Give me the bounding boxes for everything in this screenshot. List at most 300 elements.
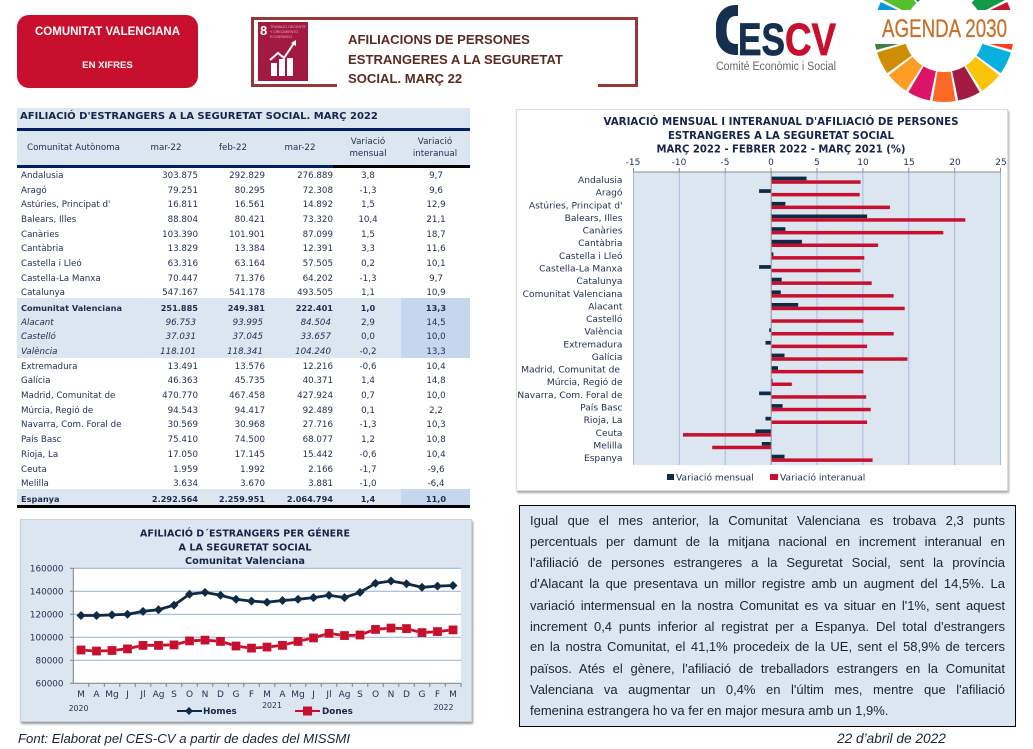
category labels: Rioja, La (584, 416, 622, 426)
category labels: Alacant (588, 302, 623, 312)
logo: CESCV (716, 5, 836, 73)
row: València: València (21, 347, 58, 357)
chart title: MARÇ 2022 - FEBRER 2022 - MARÇ 2021 (%) (656, 144, 906, 156)
row: Navarra: -1,3 (360, 420, 376, 430)
row: Cantàbria: 12.391 (303, 244, 333, 254)
row: Ceuta: Ceuta (21, 465, 47, 475)
chart title: Comunitat Valenciana (185, 556, 305, 567)
row: Galícia: 45.735 (235, 376, 265, 386)
row: Comunitat Valenciana: 1,0 (361, 303, 375, 313)
badge line: region: COMUNITAT VALENCIANA (35, 26, 180, 38)
row: Espanya: 2.259.951 (219, 494, 265, 504)
row: Astúries: 16.811 (168, 200, 198, 210)
row: València (21, 346, 446, 357)
table title band (17, 108, 470, 128)
row: Castella-La Manxa: 71.376 (235, 274, 265, 284)
row: Navarra: 30.569 (168, 420, 198, 430)
row: Catalunya: Catalunya (21, 288, 65, 298)
row: Castella-La Manxa: 70.447 (168, 274, 198, 284)
row: Cantàbria: Cantàbria (21, 244, 63, 254)
row: Castella-La Manxa: 9,7 (429, 274, 443, 284)
row: Catalunya: 493.505 (297, 288, 333, 298)
row: València: -0,2 (360, 347, 376, 357)
row: Alacant: 14,5 (426, 318, 446, 328)
category labels: País Basc (580, 404, 622, 414)
paragraph: increment 0,4 punts inferior al registrat per a Espanya. Del total d'estrangers (530, 619, 1005, 634)
row: Rioja: 10,4 (426, 450, 446, 460)
row: Aragó: Aragó (21, 186, 47, 196)
x axis labels: -10 (672, 158, 687, 168)
year labels: 2020 (69, 704, 88, 713)
row: Rioja: 17.050 (168, 450, 198, 460)
row: Extremadura (21, 362, 446, 372)
row: Castelló: 0,0 (361, 332, 375, 342)
paragraph: percentuals per damunt de la mitjana nacional en increment interanual en (530, 534, 1005, 549)
header rule navy (17, 165, 333, 168)
panel: line chart per gènere (20, 519, 472, 722)
row: Castella i Lleó (21, 258, 446, 269)
table header row (17, 128, 470, 168)
row: Galícia: Galícia (21, 376, 50, 386)
table header row: mar-22 (150, 143, 182, 153)
y axis labels: 60000 (36, 680, 64, 690)
paragraph: països. Atés el gènere, l'afiliació de treballadors estrangers en la Comunitat (530, 661, 1005, 676)
row: Canàries: 87.099 (303, 230, 333, 240)
gap in frame bottom (337, 83, 598, 88)
row: Balears: 80.421 (235, 215, 265, 225)
row: Andalusia: 303.875 (162, 171, 198, 181)
bars: variació mensual (755, 177, 867, 458)
row: Extremadura: 13.491 (168, 362, 198, 372)
x axis labels: 20 (949, 158, 961, 168)
row: Castella i Lleó: 63.164 (235, 259, 265, 269)
badge: Comunitat Valenciana en xifres (17, 15, 198, 88)
frame top and sides (251, 17, 638, 87)
row: Melilla: 3.670 (240, 479, 265, 489)
y axis labels: 120000 (30, 610, 64, 620)
title line 2: ESTRANGERES A LA SEGURETAT (348, 52, 563, 66)
row: Ceuta: -9,6 (428, 465, 444, 475)
month labels: Mg (105, 690, 119, 700)
month labels: D (217, 690, 224, 700)
month labels (77, 690, 457, 700)
row: Castelló: 37.045 (233, 332, 263, 342)
row: València: 104.240 (295, 347, 331, 357)
x axis labels: -5 (721, 158, 729, 168)
row: Alacant: Alacant (21, 318, 54, 328)
icon: SDG 8 (258, 22, 308, 81)
row: Castella-La Manxa: Castella-La Manxa (21, 274, 101, 284)
row: Comunitat Valenciana: Comunitat Valenciana (21, 303, 122, 313)
paragraph: d'Alacant la que presentava un millor registre amb un augment del 14,5%. La (530, 576, 1005, 591)
paragraph: en la nostra Comunitat, el 41,1% procedeix de la UE, sent el 58,9% de tercers (530, 639, 1005, 654)
row: Madrid: 0,7 (361, 391, 375, 401)
row: Cantàbria: 13.384 (235, 244, 265, 254)
month labels: Jl (139, 690, 146, 700)
row: Rioja: -0,6 (360, 450, 376, 460)
y axis labels: 100000 (30, 634, 64, 644)
series: Homes (81, 581, 453, 616)
row: Rioja: 17.145 (235, 450, 265, 460)
x axis labels: 0 (768, 158, 774, 168)
row: Canàries: 1,5 (361, 230, 375, 240)
paragraph: femenina estrangera ho va fer en major mesura amb un 1,9%. (530, 703, 888, 718)
row: Castella i Lleó: 57.505 (303, 259, 333, 269)
category labels: Balears, Illes (565, 214, 623, 224)
row: Espanya: 2.064.794 (287, 494, 333, 504)
category labels: Astúries, Principat d' (529, 201, 622, 211)
highlight: Espanya row (17, 489, 470, 505)
row: Astúries: 14.892 (303, 200, 333, 210)
header rule black (333, 165, 470, 168)
row: Comunitat Valenciana (21, 303, 446, 313)
month labels: A (279, 690, 286, 700)
month labels: J (311, 690, 315, 700)
row: Balears: 88.804 (168, 215, 198, 225)
legend: Homes: Homes (203, 707, 237, 717)
row: Múrcia: 94.543 (168, 406, 198, 416)
row: Astúries: 16.561 (235, 200, 265, 210)
row: Melilla: -1,0 (360, 479, 376, 489)
category labels: Canàries (583, 227, 623, 237)
row: Balears: 10,4 (358, 215, 378, 225)
row: Galícia: 14,8 (426, 376, 446, 386)
plot area (73, 568, 461, 683)
row: Comunitat Valenciana: 249.381 (228, 303, 265, 313)
row: Catalunya: 541.178 (229, 288, 265, 298)
row: Madrid: 427.924 (297, 391, 333, 401)
row: Extremadura: -0,6 (360, 362, 376, 372)
month labels: S (171, 690, 177, 700)
row: Ceuta: -1,7 (360, 465, 376, 475)
month labels: G (419, 690, 426, 700)
row: Castella i Lleó: 0,2 (361, 259, 375, 269)
category labels: Espanya (584, 454, 622, 464)
row: Espanya: 1,4 (361, 494, 375, 504)
row: Comunitat Valenciana: 251.885 (161, 303, 198, 313)
row: València: 13,3 (426, 347, 446, 357)
category labels: Extremadura (563, 340, 622, 350)
category labels: València (584, 327, 622, 338)
table: afiliació d'estrangers (17, 108, 470, 508)
row: Melilla: 3.881 (308, 479, 333, 489)
row: Múrcia: 94.417 (235, 406, 265, 416)
row: Castelló: 33.657 (301, 332, 331, 342)
row: Andalusia: 9,7 (429, 171, 443, 181)
row: Andalusia: Andalusia (21, 171, 63, 181)
row: Galícia: 1,4 (361, 376, 375, 386)
row: Castelló: Castelló (21, 332, 56, 342)
icon: SDG 8: 8 (260, 23, 267, 38)
table header row: Variació (418, 137, 452, 147)
row: País Basc: 1,2 (361, 435, 375, 445)
heading frame with SDG 8 icon and title (251, 17, 638, 87)
month labels: Jl (325, 690, 332, 700)
row: Navarra (21, 420, 446, 430)
month labels: D (403, 690, 410, 700)
row: Melilla (21, 479, 444, 489)
month labels: O (186, 690, 193, 700)
row: Castella i Lleó: 63.316 (168, 259, 198, 269)
row: València: 118.341 (227, 347, 263, 357)
row: Rioja: 15.442 (303, 450, 333, 460)
row: Múrcia (21, 406, 443, 416)
row: Canàries (21, 230, 446, 240)
table header row: interanual (413, 149, 457, 159)
text box: comentari (519, 505, 1016, 727)
row: Balears: Balears, Illes (21, 215, 76, 225)
badge line: en xifres: EN XIFRES (82, 60, 133, 71)
table header row: mar-22 (284, 143, 316, 153)
legend: Homes (177, 707, 237, 717)
row: Espanya: 2.292.564 (152, 494, 198, 504)
chart title (140, 526, 350, 567)
row: Madrid: 467.458 (229, 391, 265, 401)
month labels: N (202, 690, 208, 700)
row: Catalunya (21, 288, 446, 298)
icon: SDG 8: Y CRECIMIENTO (270, 30, 298, 34)
series: Dones (81, 628, 453, 651)
row: Astúries: 12,9 (426, 200, 446, 210)
paragraph: variació intermensual en la nostra Comunitat es va situar en l'1%, sent aquest (530, 598, 1005, 612)
category labels: Ceuta (596, 429, 622, 439)
row: Galícia: 46.363 (168, 376, 198, 386)
row: Alacant: 2,9 (361, 318, 375, 328)
row: Cantàbria: 11,6 (426, 244, 446, 254)
icon: SDG 8: ECONÓMICO (270, 34, 292, 39)
row: Castella-La Manxa (21, 274, 443, 284)
row: Rioja (21, 450, 446, 460)
category labels: Madrid, Comunitat de (521, 366, 620, 376)
chart title: VARIACIÓ MENSUAL I INTERANUAL D'AFILIACIÓ DE PERSONES (604, 115, 958, 128)
row: Melilla: 3.634 (173, 479, 198, 489)
row: Andalusia: 3,8 (361, 171, 375, 181)
row: Alacant (20, 318, 446, 328)
row: Aragó: 80.295 (235, 186, 265, 196)
row: Cantàbria: 13.829 (168, 244, 198, 254)
row: Canàries: 18,7 (426, 230, 446, 240)
row: Madrid: 10,0 (426, 391, 446, 401)
row: Catalunya: 1,1 (361, 288, 375, 298)
month labels: M (263, 690, 271, 700)
category labels: Múrcia, Regió de (547, 377, 623, 388)
month labels: N (388, 690, 394, 700)
table title: AFILIACIÓ D'ESTRANGERS A LA SEGURETAT SOCIAL. MARÇ 2022 (20, 111, 378, 122)
row: Canàries: 103.390 (162, 230, 198, 240)
paragraph: Valenciana va augmentar un 0,4% en l'últim mes, mentre que l'afiliació (530, 682, 1005, 696)
row: Navarra: Navarra, Com. Foral de (21, 420, 121, 430)
row: Múrcia: Múrcia, Regió de (21, 406, 93, 416)
year labels: 2021 (262, 701, 282, 710)
category labels (517, 176, 623, 464)
row: Múrcia: 92.489 (303, 406, 333, 416)
y axis labels: 80000 (36, 656, 64, 666)
logo: CESCV: ES (738, 14, 785, 65)
month labels: Ag (153, 690, 164, 700)
row: Cantàbria: 3,3 (361, 244, 375, 254)
month labels: Ag (339, 690, 350, 700)
row: Extremadura: 13.576 (235, 362, 265, 372)
row: Balears: 21,1 (426, 215, 446, 225)
icon: SDG 8: TRABAJO DECENTE (270, 25, 307, 29)
row: Madrid (21, 391, 446, 401)
logo: Agenda 2030 wheel (875, 0, 1013, 102)
row: Castelló: 10,0 (426, 332, 446, 342)
highlight: Comunitat Valenciana block (17, 298, 470, 358)
row: Ceuta (21, 465, 444, 475)
row: Alacant: 84.504 (301, 318, 331, 328)
row: Madrid: Madrid, Comunitat de (21, 391, 115, 401)
x axis labels: 15 (903, 158, 915, 168)
category labels: Aragó (596, 188, 623, 199)
plot area (633, 172, 1001, 465)
row: Canàries: 101.901 (229, 230, 265, 240)
year labels: 2022 (434, 703, 453, 712)
row: Alacant: 96.753 (166, 318, 196, 328)
row: Comunitat Valenciana: 13,3 (426, 303, 446, 313)
row: Melilla: -6,4 (428, 479, 444, 489)
legend: Dones (295, 706, 353, 717)
row: País Basc: 75.410 (168, 435, 198, 445)
row: Castella-La Manxa: 64.202 (303, 274, 333, 284)
row: Navarra: 10,3 (426, 420, 446, 430)
chart title: A LA SEGURETAT SOCIAL (178, 542, 312, 554)
row: Catalunya: 547.167 (162, 288, 198, 298)
row: País Basc: 10,8 (426, 435, 446, 445)
chart title (604, 115, 958, 156)
row: Ceuta: 1.959 (173, 465, 198, 475)
category labels: Catalunya (576, 277, 622, 287)
row: Extremadura: 12.216 (303, 362, 333, 372)
row: Ceuta: 2.166 (308, 465, 333, 475)
row: País Basc: 68.077 (303, 435, 333, 445)
paragraph: l'afiliació de persones estrangeres a la Seguretat Social, sent la província (530, 555, 1005, 570)
row: Aragó (21, 186, 443, 196)
row: Castelló: 37.031 (166, 332, 196, 342)
row: Comunitat Valenciana: 222.401 (296, 303, 333, 313)
row: Andalusia: 276.889 (297, 171, 333, 181)
table bottom rule (17, 505, 470, 508)
row: Balears: 73.320 (303, 215, 333, 225)
title line 1: AFILIACIONS DE PERSONES (348, 32, 530, 47)
row: València: 118.101 (160, 347, 196, 357)
row: Aragó: -1,3 (360, 186, 376, 196)
month labels: S (357, 690, 363, 700)
legend: Variació interanual (780, 472, 865, 484)
row: Astúries: 1,5 (361, 200, 375, 210)
chart title: AFILIACIÓ D´ESTRANGERS PER GÉNERE (140, 526, 350, 540)
row: Castella i Lleó: Castella i Lleó (21, 259, 82, 269)
row: Extremadura: Extremadura (21, 362, 77, 372)
table header row: mensual (349, 149, 387, 159)
category labels: Comunitat Valenciana (523, 290, 622, 300)
month labels: J (125, 690, 129, 700)
row: Balears (21, 215, 446, 225)
x axis labels: -15 (626, 158, 640, 168)
row: Aragó: 9,6 (429, 186, 443, 196)
category labels: Galícia (592, 353, 622, 363)
row: Espanya (21, 494, 446, 504)
paragraph: Igual que el mes anterior, la Comunitat Valenciana es trobava 2,3 punts (530, 513, 1005, 528)
row: Alacant: 93.995 (233, 318, 263, 328)
title line 3: SOCIAL. MARÇ 22 (348, 71, 462, 86)
row: Cantàbria (21, 244, 446, 254)
category labels: Castelló (586, 314, 623, 325)
row: Múrcia: 0,1 (361, 406, 375, 416)
month labels: A (93, 690, 100, 700)
legend: Variació mensual (676, 472, 754, 484)
row: País Basc (21, 434, 446, 445)
row: Madrid: 470.770 (162, 391, 198, 401)
y axis labels (30, 564, 64, 690)
row: Extremadura: 10,4 (426, 362, 446, 372)
row: Espanya: Espanya (21, 494, 60, 504)
category labels: Navarra, Com. Foral de (517, 391, 623, 401)
category labels: Castella-La Manxa (539, 264, 622, 274)
panel: bar chart variació mensual i interanual (516, 109, 1008, 491)
row: Canàries: Canàries (21, 230, 59, 240)
table header row: feb-22 (219, 143, 247, 153)
row: Castella-La Manxa: -1,3 (360, 274, 376, 284)
year labels (69, 701, 453, 713)
row: Espanya: 11,0 (426, 494, 446, 504)
row: Rioja: Rioja, La (21, 450, 58, 460)
row: País Basc: País Basc (21, 435, 61, 445)
row: Astúries: Astúries, Principat d' (21, 200, 110, 210)
x axis labels (626, 158, 1007, 168)
category labels: Andalusia (578, 176, 622, 186)
month labels: Mg (291, 690, 305, 700)
highlight: interanual cells (401, 298, 470, 358)
x axis labels: 10 (857, 158, 869, 168)
row: Ceuta: 1.992 (240, 465, 265, 475)
row: Aragó: 79.251 (168, 186, 198, 196)
row: Castella i Lleó: 10,1 (426, 259, 446, 269)
row: Astúries (21, 200, 446, 210)
date: 22 d’abril de 2022 (837, 731, 946, 746)
row: País Basc: 74.500 (235, 435, 265, 445)
y axis labels: 160000 (30, 564, 64, 574)
category labels: Cantàbria (578, 239, 622, 249)
bars: variació interanual (683, 180, 965, 462)
row: Galícia (21, 376, 446, 386)
month labels: M (77, 690, 85, 700)
row: Castelló (21, 332, 446, 342)
x axis labels: 5 (814, 158, 820, 168)
table header row: Comunitat Autònoma (27, 143, 120, 153)
source note: Font: Elaborat pel CES-CV a partir de dades del MISSMI (18, 731, 350, 746)
month labels: O (372, 690, 379, 700)
category labels: Castella i Lleó (559, 251, 623, 262)
table header row: Variació (351, 137, 385, 147)
month labels: F (249, 690, 254, 700)
row: Múrcia: 2,2 (429, 406, 443, 416)
row: Catalunya: 10,9 (426, 288, 446, 298)
y axis labels: 140000 (30, 588, 64, 598)
row: Andalusia: 292.829 (229, 171, 265, 181)
row: Andalusia (21, 171, 443, 181)
row: Aragó: 72.308 (303, 186, 333, 196)
legend: Dones: Dones (322, 707, 353, 717)
month labels: F (435, 690, 440, 700)
row: Navarra: 27.716 (303, 420, 333, 430)
category labels: Melilla (593, 441, 622, 451)
x axis labels: 25 (995, 158, 1007, 168)
month labels: G (233, 690, 240, 700)
row: Galícia: 40.371 (303, 376, 333, 386)
month labels: M (449, 690, 457, 700)
chart title: ESTRANGERES A LA SEGURETAT SOCIAL (668, 131, 895, 142)
